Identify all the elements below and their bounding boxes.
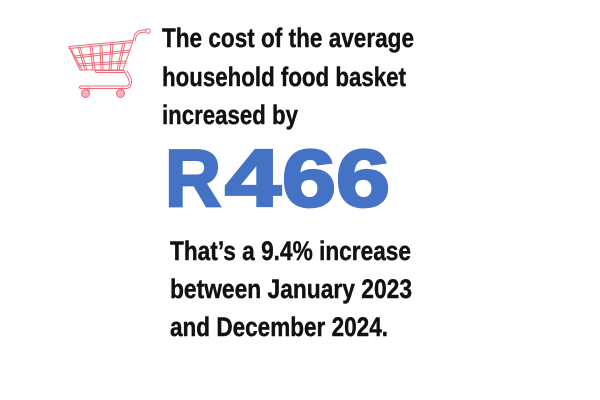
big number: R466: 4	[225, 134, 281, 224]
detail text: between January 2023	[170, 274, 412, 304]
heading text: increased by	[162, 100, 298, 130]
big number: R466: 6	[282, 134, 336, 224]
detail text: and December 2024.	[170, 312, 388, 342]
big number: R466	[165, 134, 390, 224]
heading text	[162, 23, 414, 130]
big number: R466: R	[165, 134, 221, 224]
detail text	[170, 236, 412, 342]
detail text: That’s a 9.4% increase	[170, 236, 411, 266]
big number: R466: 6	[336, 134, 390, 224]
icon: shopping cart	[69, 29, 150, 93]
icon: cart wheels	[82, 90, 124, 98]
heading text: household food basket	[162, 62, 406, 92]
heading text: The cost of the average	[162, 23, 414, 53]
